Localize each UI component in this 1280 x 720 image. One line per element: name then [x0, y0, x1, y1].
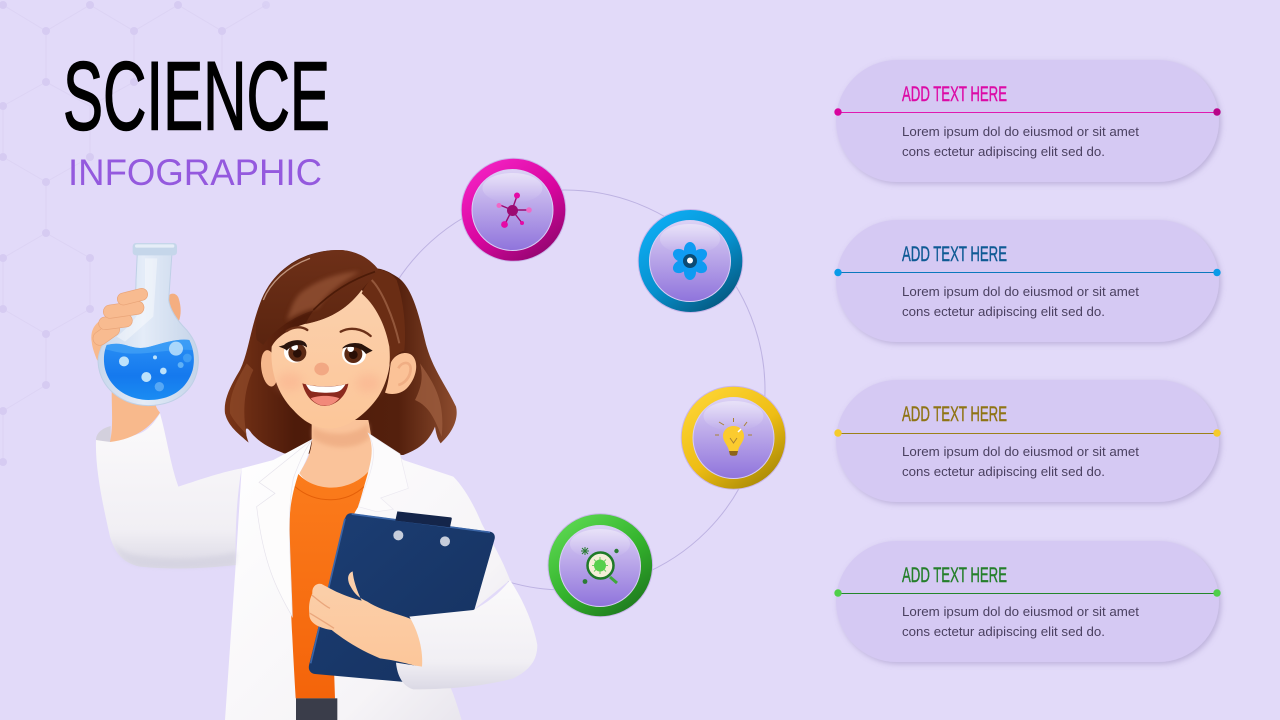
- body text: cons ectetur adipiscing elit sed do.: [902, 304, 1105, 319]
- right ear: [385, 353, 416, 394]
- flask lip: [133, 243, 177, 255]
- heading: ADD TEXT HERE: [902, 403, 1007, 426]
- shirt: [289, 472, 368, 698]
- neck: [299, 420, 372, 488]
- node: yellow light bulb: [681, 386, 786, 489]
- node: green magnifier: [548, 514, 653, 617]
- front hair: [256, 250, 379, 345]
- left eye: [279, 340, 307, 363]
- eyebrows: [287, 327, 371, 336]
- hair back: [225, 250, 457, 455]
- right front hair highlight: [372, 280, 399, 343]
- body text: cons ectetur adipiscing elit sed do.: [902, 624, 1105, 639]
- icon: bulb: [715, 418, 752, 456]
- holding hand: [309, 571, 431, 670]
- divider with dots: [834, 269, 1221, 276]
- coat body: [225, 433, 510, 720]
- body text: Lorem ipsum dol do eiusmod or sit amet: [902, 604, 1139, 619]
- liquid: [104, 340, 194, 400]
- body text: Lorem ipsum dol do eiusmod or sit amet: [902, 444, 1139, 459]
- divider with dots: [834, 589, 1221, 597]
- heading: ADD TEXT HERE: [902, 243, 1007, 266]
- left lapel: [257, 439, 312, 617]
- panel: blue: [834, 220, 1221, 342]
- palm: [91, 318, 127, 361]
- background hexagon pattern: [0, 1, 270, 466]
- heading: ADD TEXT HERE: [902, 564, 1007, 587]
- gripping fingers: [100, 294, 142, 338]
- hair strands highlight: [287, 272, 360, 321]
- body text: cons ectetur adipiscing elit sed do.: [902, 464, 1105, 479]
- heading: ADD TEXT HERE: [902, 83, 1007, 106]
- right eye: [342, 343, 373, 365]
- finger lines: [310, 595, 334, 628]
- right front hair: [362, 269, 405, 365]
- pants: [296, 698, 337, 720]
- right lapel: [358, 433, 408, 512]
- node: pink molecule: [461, 158, 566, 261]
- node: blue atom flower: [638, 210, 743, 312]
- raised hand back finger: [167, 294, 181, 322]
- illustration: scientist: [91, 243, 537, 720]
- divider with dots: [834, 429, 1221, 437]
- left ear: [259, 349, 280, 388]
- chin shadow: [313, 423, 369, 447]
- forearm: [110, 390, 160, 442]
- divider with dots: [834, 108, 1221, 116]
- head: [271, 290, 390, 428]
- body text: Lorem ipsum dol do eiusmod or sit amet: [902, 284, 1139, 299]
- clipboard: [309, 511, 495, 682]
- panel: gold: [834, 380, 1221, 502]
- blush right: [356, 374, 381, 393]
- icon: magnifier and virus: [581, 547, 619, 584]
- raised sleeve: [96, 413, 242, 568]
- title: SCIENCE: [63, 42, 330, 150]
- sleeve shading: [113, 540, 237, 568]
- clipboard clip: [395, 511, 452, 527]
- flask: [98, 243, 198, 406]
- icon: flower: [671, 242, 709, 280]
- panel: green: [834, 541, 1221, 662]
- hair back highlight: [415, 363, 442, 437]
- clipboard rivets: [393, 530, 403, 540]
- sleeve cuff: [96, 426, 111, 442]
- flask shine: [117, 258, 157, 342]
- body text: [902, 284, 1139, 319]
- shirt collar seam: [295, 487, 364, 500]
- body text: [902, 124, 1139, 159]
- subtitle: INFOGRAPHIC: [68, 152, 322, 193]
- mouth: [302, 383, 348, 406]
- right sleeve: [396, 580, 537, 689]
- nose: [314, 363, 329, 375]
- body text: [902, 604, 1139, 639]
- connecting arc: [365, 190, 765, 590]
- panel: pink: [834, 60, 1221, 182]
- blush left: [277, 372, 303, 391]
- body text: cons ectetur adipiscing elit sed do.: [902, 144, 1105, 159]
- bubbles: [119, 342, 192, 391]
- icon: molecule: [496, 192, 532, 228]
- left hair highlight: [230, 363, 253, 435]
- body text: [902, 444, 1139, 479]
- body text: Lorem ipsum dol do eiusmod or sit amet: [902, 124, 1139, 139]
